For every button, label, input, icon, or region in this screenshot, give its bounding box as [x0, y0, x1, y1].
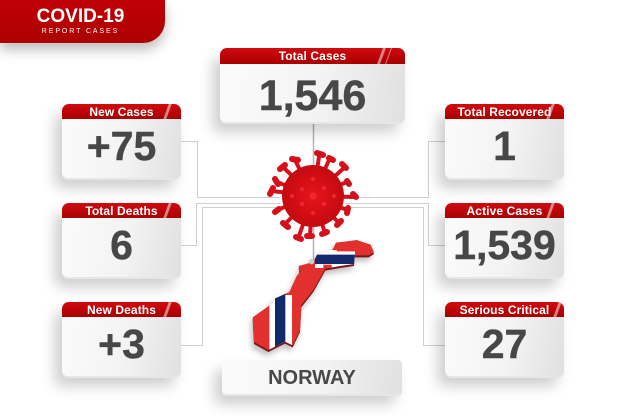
panel: new deaths: New Deaths [87, 303, 156, 317]
panel: new cases [62, 104, 181, 178]
panel: new cases: New Cases [89, 105, 154, 119]
panel: country name: NORWAY [268, 367, 356, 389]
icon: virus [266, 150, 359, 242]
title: COVID-19 [37, 6, 124, 27]
panel: total cases [220, 48, 405, 122]
icon: Norway flag map [248, 240, 374, 358]
panel: total recovered: Total Recovered [458, 105, 551, 119]
panel: serious critical [445, 302, 564, 376]
panel: total recovered [445, 104, 564, 178]
header banner [0, 0, 165, 43]
panel: serious critical: Serious Critical [460, 303, 549, 317]
panel: active cases [445, 203, 564, 277]
panel: total recovered: 1 [493, 123, 516, 169]
panel: total deaths: 6 [110, 222, 133, 268]
panel: new deaths: +3 [98, 321, 145, 367]
subtitle: REPORT CASES [42, 28, 119, 35]
panel: active cases: Active Cases [467, 204, 542, 218]
map extrusion [253, 242, 374, 352]
panel: new deaths [62, 302, 181, 376]
panel: total cases: Total Cases [279, 49, 346, 63]
panel: new cases: +75 [87, 123, 156, 169]
panel: country name [222, 360, 402, 394]
panel: total deaths [62, 203, 181, 277]
panel: serious critical: 27 [482, 321, 527, 367]
panel: total cases: 1,546 [259, 72, 366, 120]
panel: active cases: 1,539 [453, 222, 556, 268]
panel: total deaths: Total Deaths [85, 204, 158, 218]
